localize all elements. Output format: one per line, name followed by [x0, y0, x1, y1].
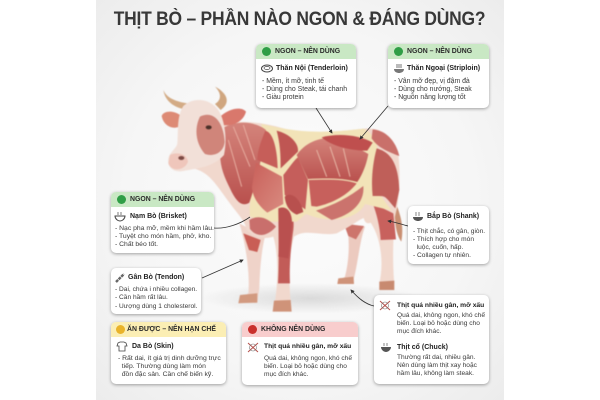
panel header: ĂN ĐƯỢC – NÊN HẠN CHẾ	[127, 326, 216, 333]
icon: bowl	[114, 212, 126, 222]
description: biến. Loại bỏ hoặc dùng cho	[264, 362, 347, 370]
icon: bowl	[381, 343, 391, 352]
arrow: striploin	[360, 106, 388, 139]
panel: striploin	[388, 44, 489, 108]
far front leg	[238, 223, 265, 303]
panel: tenderloin	[256, 44, 356, 108]
head	[168, 100, 225, 171]
icon: crossed meat	[248, 342, 258, 352]
name: Thăn Nội (Tenderloin)	[276, 65, 348, 72]
name: Da Bò (Skin)	[132, 343, 174, 350]
panel: skin	[111, 322, 226, 384]
description	[118, 354, 221, 378]
description: - Vân mỡ đẹp, vị đậm đà	[394, 78, 470, 85]
description: hầm lâu, không làm steak.	[397, 370, 474, 377]
lower chest muscle	[249, 217, 276, 235]
panel header	[256, 44, 356, 59]
description: - Nạc pha mỡ, mềm khi hầm lâu.	[115, 225, 214, 232]
description: - Dai, chứa i nhiều collagen.	[115, 286, 197, 293]
panel: do not use	[242, 322, 358, 385]
striploin muscle	[322, 135, 373, 151]
forearm muscle	[278, 207, 292, 258]
tail	[395, 207, 402, 242]
background panel	[96, 0, 504, 400]
udder	[363, 210, 373, 223]
panel: brisket	[111, 192, 214, 253]
panel: bad meat and chuck	[374, 295, 489, 384]
icon: steak	[261, 64, 273, 72]
arrow: shank	[388, 221, 408, 226]
icon: crossed meat	[380, 300, 390, 310]
arrow: tendon	[202, 260, 243, 278]
arrow: brisket	[214, 217, 250, 228]
description: - Cần hầm rất lâu.	[115, 294, 168, 301]
description: Quá dai, không ngon, khó chế	[397, 312, 485, 319]
arrow: tenderloin	[316, 108, 332, 133]
panel header	[111, 322, 226, 337]
description: - Chất béo tốt.	[115, 241, 158, 248]
name: Nạm Bò (Brisket)	[130, 213, 187, 220]
description: - Mềm, ít mỡ, tinh tế	[262, 78, 324, 85]
description: Nên dùng làm thịt xay hoặc	[397, 362, 477, 369]
name: Thịt cổ (Chuck)	[397, 344, 448, 351]
description: đồn đặc sản. Cần chế biến kỹ.	[122, 370, 213, 378]
icon: bowl	[413, 212, 423, 221]
panel header	[242, 322, 358, 337]
icon: tendon	[115, 273, 125, 283]
description: - Thịt chắc, có gân, giòn.	[413, 228, 485, 234]
icon: bowl	[394, 64, 404, 73]
description: biến. Loại bỏ hoặc dùng cho	[397, 320, 480, 327]
description: mục đích khác.	[264, 370, 308, 378]
hooves	[238, 293, 257, 303]
name: Thăn Ngoại (Striploin)	[407, 65, 480, 72]
horns	[163, 90, 187, 109]
description: - Dùng cho Steak, tái chanh	[262, 86, 347, 93]
panel header: NGON – NÊN DÙNG	[275, 48, 340, 55]
description	[115, 286, 197, 310]
description: Quá dai, không ngon, khó chế	[264, 354, 352, 362]
description: - Nguồn năng lượng tốt	[394, 94, 466, 101]
body base	[193, 122, 400, 302]
name: Gân Bò (Tendon)	[128, 274, 184, 281]
description	[397, 312, 485, 335]
arrow: bad meat	[351, 290, 374, 306]
panel header	[388, 44, 489, 59]
description	[115, 225, 214, 248]
rear leg upper	[373, 203, 396, 240]
description	[262, 77, 347, 101]
description: mục đích khác.	[397, 328, 441, 335]
panel header: KHÔNG NÊN DÙNG	[261, 326, 325, 333]
description: - Rất dai, ít giá trị dinh dưỡng trực	[118, 354, 221, 362]
description: - Giàu protein	[262, 94, 304, 101]
ground shadow	[200, 283, 420, 313]
description: - Dùng cho nướng, Steak	[394, 86, 472, 93]
icon: hide	[116, 342, 128, 352]
description: - Thích hợp cho món	[413, 236, 474, 242]
neck muscle	[220, 123, 266, 204]
description: - Uượng dùng 1 cholesterol.	[115, 303, 197, 310]
shoulder muscles	[257, 131, 278, 168]
description: luộc, cuốn, hấp.	[417, 244, 463, 250]
description	[394, 78, 472, 101]
title: THỊT BÒ – PHẦN NÀO NGON & ĐÁNG DÙNG?	[114, 9, 485, 30]
description: Thường rất dai, nhiều gân.	[397, 354, 475, 361]
ears	[162, 112, 180, 128]
fat layer	[250, 124, 392, 222]
description: tiếp. Thường dùng làm món	[122, 362, 206, 370]
near front leg	[278, 207, 294, 283]
name: Thịt quá nhiều gân, mỡ xấu	[397, 302, 484, 308]
panel header	[111, 192, 214, 207]
rump muscles	[372, 129, 399, 156]
description: - Tuyệt cho món hầm, phở, kho.	[115, 233, 211, 240]
panel: shank	[408, 206, 489, 264]
rib muscles	[297, 137, 368, 182]
name: Bắp Bò (Shank)	[427, 213, 479, 220]
panel header: NGON – NÊN DÙNG	[407, 48, 472, 55]
description: - Collagen tự nhiên.	[413, 252, 471, 258]
panel: tendon	[111, 268, 201, 314]
far rear leg	[337, 223, 365, 284]
panel header: NGON – NÊN DÙNG	[130, 196, 195, 203]
description	[413, 227, 485, 258]
description	[264, 354, 352, 378]
description	[397, 354, 477, 377]
name: Thịt quá nhiều gân, mỡ xấu	[264, 343, 351, 350]
